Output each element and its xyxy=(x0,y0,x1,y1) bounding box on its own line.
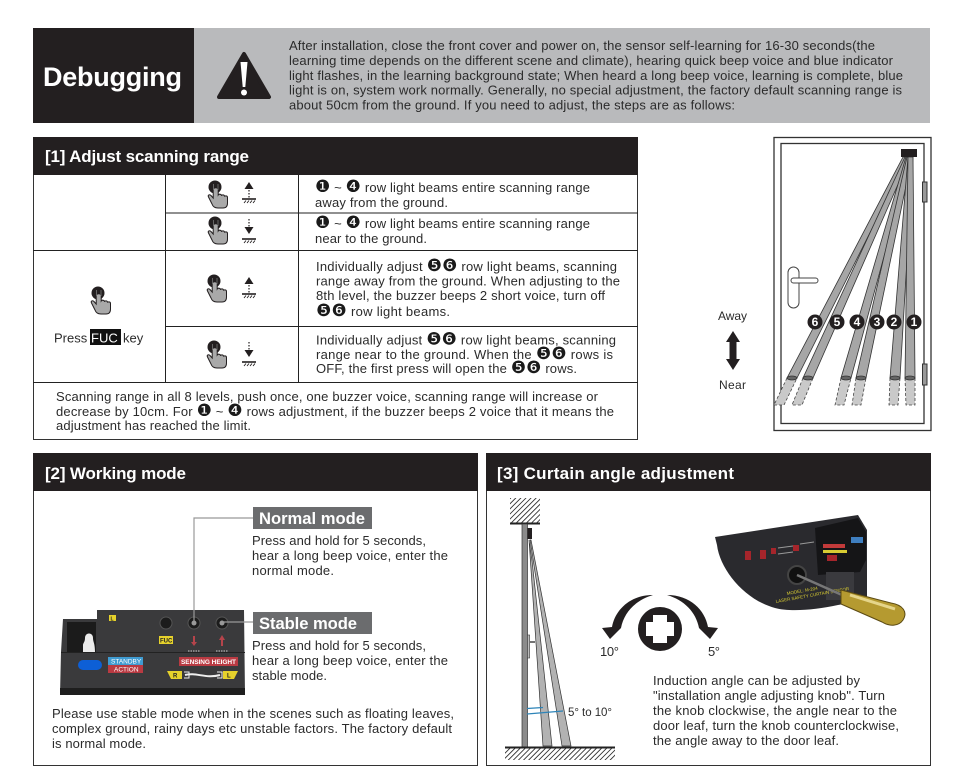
stable mode label and text: hear a long beep voice, enter the xyxy=(252,653,448,668)
light beams xyxy=(774,157,915,405)
row 3: rows 5 6 away: Individually adjust ❺❻ row light beams, scanning xyxy=(316,256,617,276)
beam numbers: 4 xyxy=(854,315,861,329)
normal mode label and text: Press and hold for 5 seconds, xyxy=(252,533,426,548)
away near arrow xyxy=(718,309,747,392)
normal mode label and text: Normal mode xyxy=(259,509,365,528)
row 3: rows 5 6 away: ❺❻ row light beams. xyxy=(316,301,450,321)
device with screwdriver: MODEL: M-204 xyxy=(786,586,818,596)
note: stable mode usage: complex ground, rainy days etc unstable factors. The factory default xyxy=(52,721,452,736)
device: control panel: FUC xyxy=(160,638,173,644)
device with screwdriver xyxy=(715,515,905,625)
heading: curtain angle adjustment xyxy=(486,453,931,491)
device: control panel: L xyxy=(227,674,231,680)
title block: Debugging: Debugging xyxy=(43,62,182,92)
row 1: all rows away: away from the ground. xyxy=(315,195,448,210)
row 3: rows 5 6 away xyxy=(207,256,620,321)
device: control panel: L xyxy=(110,616,114,622)
note: stable mode usage: Please use stable mode when in the scenes such as floating leaves, xyxy=(52,706,454,721)
beam numbers: 5 xyxy=(834,315,841,329)
row 3: rows 5 6 away: 8th level, the buzzer beeps 2 short voice, turn off xyxy=(316,288,605,303)
device: control panel xyxy=(60,610,245,695)
sensor bar xyxy=(901,149,917,157)
angle adjustment text: the knob clockwise, the angle near to the xyxy=(653,703,897,718)
FUC key cell: FUC xyxy=(91,330,118,346)
FUC key cell: Press xyxy=(54,330,88,346)
stable mode label and text: stable mode. xyxy=(252,668,327,683)
row 4: rows 5 6 near: OFF, the first press will open the ❺❻ rows. xyxy=(316,358,577,378)
intro text: learning time depends on the different scene and climate), hearing quick beep voice and blue indicator xyxy=(289,53,894,68)
callout lines xyxy=(194,518,253,622)
icon: warning triangle xyxy=(219,54,269,97)
heading: adjust scanning range: [1] Adjust scanning range xyxy=(45,147,249,166)
icon: adjusting knob with arrows xyxy=(600,595,720,659)
note: scanning levels xyxy=(56,389,614,433)
row 1: all rows away: ❶ ~ ❹ row light beams entire scanning range xyxy=(315,177,590,197)
row 2: all rows near: ❶ ~ ❹ row light beams entire scanning range xyxy=(315,213,590,233)
intro text: After installation, close the front cover and power on, the sensor self-learning for 16-30 seconds(the xyxy=(289,38,875,53)
device with screwdriver: LASER SAFETY CURTAIN SENSOR xyxy=(775,586,850,604)
beam numbers: 3 xyxy=(874,315,881,329)
intro text: light flashes, in the learning background state; When heard a long beep voice, learning is complete, blue xyxy=(289,68,903,83)
heading: working mode: [2] Working mode xyxy=(45,464,186,483)
panel: curtain angle adjustment xyxy=(486,453,931,766)
heading: curtain angle adjustment: [3] Curtain angle adjustment xyxy=(497,464,734,483)
row 4: rows 5 6 near xyxy=(207,330,616,378)
heading: working mode xyxy=(33,453,478,491)
row 2: all rows near xyxy=(208,213,590,246)
normal mode label and text: normal mode. xyxy=(252,563,334,578)
angle adjustment text: door leaf, turn the knob counterclockwise, xyxy=(653,718,899,733)
device: control panel: ACTION xyxy=(114,666,139,674)
side view door diagram: 5° to 10° xyxy=(568,707,612,719)
stable mode label and text: Press and hold for 5 seconds, xyxy=(252,638,426,653)
FUC key cell: key xyxy=(123,330,144,346)
intro text xyxy=(289,38,903,112)
side view door diagram xyxy=(505,498,615,760)
icon: adjusting knob with arrows: 10° xyxy=(600,644,619,659)
angle adjustment text: "installation angle adjusting knob". Turn xyxy=(653,688,885,703)
icon: adjusting knob with arrows: 5° xyxy=(708,644,720,659)
beam numbers xyxy=(808,314,922,330)
note: stable mode usage: is normal mode. xyxy=(52,736,146,751)
row 3: rows 5 6 away: range away from the ground. When adjusting to the xyxy=(316,274,620,288)
door diagram with beams xyxy=(774,138,931,430)
device: control panel: R xyxy=(173,674,178,680)
debugging banner xyxy=(33,28,930,123)
note: scanning levels: adjustment has reached the limit. xyxy=(56,418,251,433)
panel: adjust scanning range xyxy=(33,137,638,440)
normal mode label and text: hear a long beep voice, enter the xyxy=(252,548,448,563)
heading: adjust scanning range xyxy=(33,137,638,175)
title block: Debugging xyxy=(33,28,194,123)
angle adjustment text: Induction angle can be adjusted by xyxy=(653,673,860,688)
row 4: rows 5 6 near: Individually adjust ❺❻ row light beams, scanning xyxy=(316,330,616,350)
device: control panel: STANDBY xyxy=(111,658,142,666)
intro text: about 50cm from the ground. If you need to adjust, the steps are as follows: xyxy=(289,98,735,112)
beam numbers: 2 xyxy=(891,315,898,329)
normal mode label and text xyxy=(252,507,448,578)
hinges xyxy=(922,182,927,385)
door handle xyxy=(788,267,818,308)
away near arrow: Away xyxy=(718,309,747,323)
door frame xyxy=(774,138,931,430)
away near arrow: Near xyxy=(719,378,746,392)
row 4: rows 5 6 near: range near to the ground. When the ❺❻ rows is xyxy=(316,344,614,364)
device: control panel: SENSING HEIGHT xyxy=(181,659,236,666)
row 1: all rows away xyxy=(208,177,590,210)
angle adjustment text: the angle away to the door leaf. xyxy=(653,733,839,748)
note: stable mode usage xyxy=(52,706,454,751)
FUC key cell xyxy=(54,286,144,346)
stable mode label and text xyxy=(252,612,448,683)
beam numbers: 6 xyxy=(812,315,819,329)
intro text: light is on, system work normally. Generally, no special adjustment, the factory default scanning range is xyxy=(289,82,902,98)
stable mode label and text: Stable mode xyxy=(259,614,357,633)
row 2: all rows near: near to the ground. xyxy=(315,231,427,246)
note: scanning levels: decrease by 10cm. For ❶ ~ ❹ rows adjustment, if the buzzer beeps 2 voice that it means the xyxy=(56,401,614,421)
angle adjustment text xyxy=(653,673,899,748)
note: scanning levels: Scanning range in all 8 levels, push once, one buzzer voice, scanning range will increase or xyxy=(56,389,599,404)
table grid xyxy=(33,175,638,382)
beam numbers: 1 xyxy=(911,315,918,329)
panel: working mode xyxy=(33,453,478,766)
